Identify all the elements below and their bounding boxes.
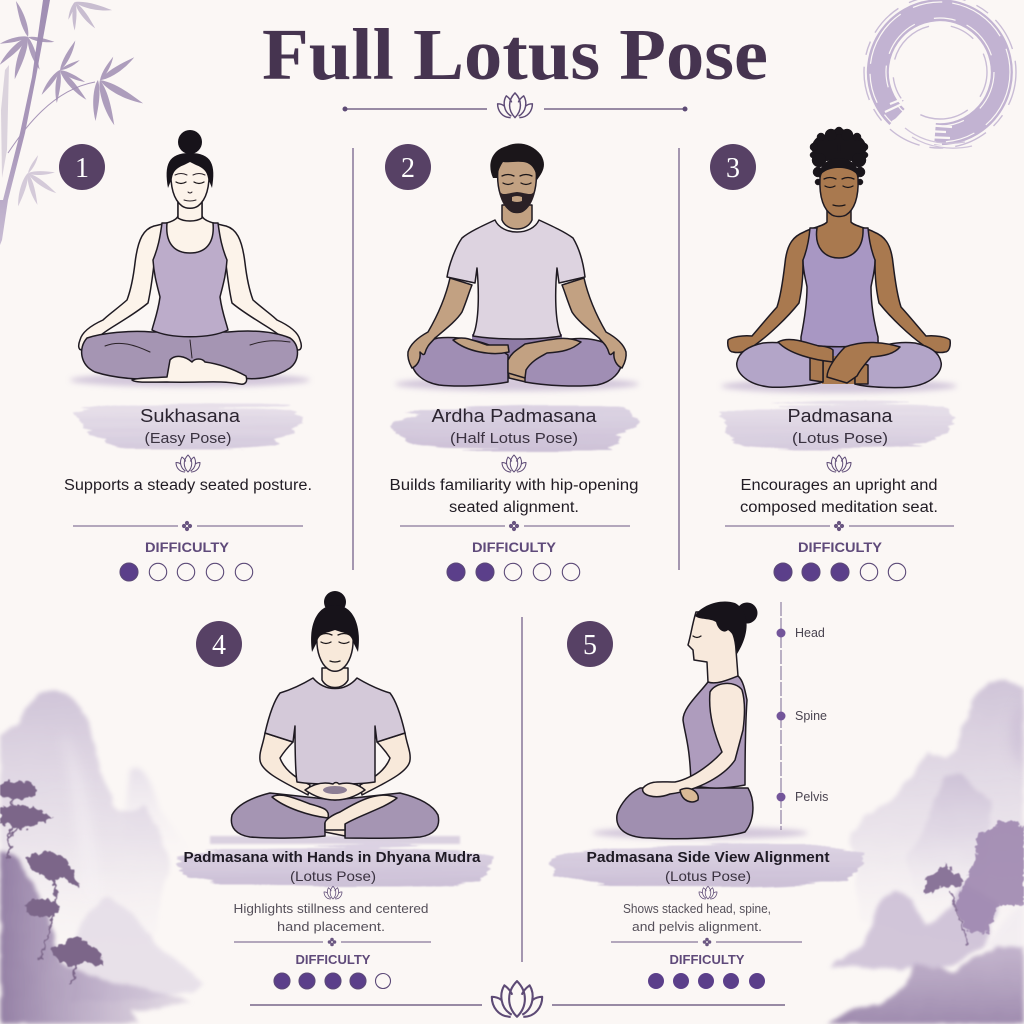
divider 4 xyxy=(234,938,431,946)
subtitle 3: (Lotus Pose) xyxy=(792,430,888,447)
footer ornament xyxy=(250,981,785,1017)
description 4: hand placement. xyxy=(277,919,385,934)
figure 5 xyxy=(592,601,808,839)
lotus icon 1 xyxy=(176,455,200,472)
panel 3: Padmasana xyxy=(710,127,957,581)
panel 5: Padmasana Side View Alignment xyxy=(550,601,865,989)
divider: column 4-5 xyxy=(521,617,523,962)
decoration: misty mountains bottom-right xyxy=(825,680,1024,1024)
description 3: Encourages an upright and xyxy=(740,477,938,494)
lotus icon 3 xyxy=(827,455,851,472)
decoration: bamboo top-left xyxy=(0,0,146,245)
name 2: Ardha Padmasana xyxy=(432,406,598,426)
figure 1 xyxy=(70,130,310,387)
number badge 2 xyxy=(385,144,431,190)
figure 2 xyxy=(395,143,639,391)
number badge 3 xyxy=(710,144,756,190)
description 5: and pelvis alignment. xyxy=(632,919,762,934)
alignment guide xyxy=(776,602,828,830)
decoration: misty mountains bottom-left xyxy=(0,690,205,1024)
subtitle 1: (Easy Pose) xyxy=(144,430,232,447)
divider 2 xyxy=(400,521,630,531)
rating dots 4 xyxy=(274,973,390,989)
lotus icon 5 xyxy=(699,886,717,899)
rating dots 2 xyxy=(447,563,580,581)
divider: column 2-3 xyxy=(678,148,680,570)
description 3 xyxy=(740,477,938,516)
panel 1: Sukhasana xyxy=(59,130,312,581)
name 3: Padmasana xyxy=(788,406,894,426)
description 2: Builds familiarity with hip-opening xyxy=(390,477,638,494)
title ornament xyxy=(343,93,687,118)
difficulty label 2: DIFFICULTY xyxy=(472,539,557,555)
number badge 4: 4 xyxy=(212,630,226,661)
divider: column 1-2 xyxy=(352,148,354,570)
name 4: Padmasana with Hands in Dhyana Mudra xyxy=(184,850,481,866)
name 5: Padmasana Side View Alignment xyxy=(586,850,830,866)
divider 1 xyxy=(73,521,303,531)
description 4 xyxy=(234,901,428,934)
description 4: Highlights stillness and centered xyxy=(234,901,428,916)
number badge 2: 2 xyxy=(401,153,415,184)
number badge 1 xyxy=(59,144,105,190)
figure 4 xyxy=(210,591,460,844)
alignment guide: Pelvis xyxy=(795,790,828,804)
panel 4: Padmasana with Hands in Dhyana Mudra xyxy=(175,591,495,989)
number badge 3: 3 xyxy=(726,153,740,184)
subtitle 2: (Half Lotus Pose) xyxy=(450,430,578,447)
name band 5 xyxy=(550,845,865,887)
subtitle 4: (Lotus Pose) xyxy=(290,868,376,884)
divider 3 xyxy=(725,521,954,531)
description 2 xyxy=(390,477,638,516)
difficulty label 4: DIFFICULTY xyxy=(296,952,371,967)
description 5: Shows stacked head, spine, xyxy=(623,901,771,916)
rating dots 1 xyxy=(120,563,253,581)
divider 5 xyxy=(611,938,802,946)
rating dots 3 xyxy=(774,563,906,581)
name band 4 xyxy=(175,845,495,888)
rating dots 5 xyxy=(648,973,765,989)
difficulty label 5: DIFFICULTY xyxy=(670,952,745,967)
title: Full Lotus Pose xyxy=(262,14,768,95)
lotus icon 2 xyxy=(502,455,526,472)
number badge 1: 1 xyxy=(75,153,89,184)
difficulty label 3: DIFFICULTY xyxy=(798,539,883,555)
figure 3 xyxy=(721,127,957,393)
name band 3 xyxy=(722,404,955,450)
description 1: Supports a steady seated posture. xyxy=(64,477,312,494)
difficulty label 1: DIFFICULTY xyxy=(145,539,230,555)
name band 1 xyxy=(72,404,305,450)
panel 2: Ardha Padmasana xyxy=(385,143,640,581)
description 3: composed meditation seat. xyxy=(740,499,938,516)
decoration: enso circle top-right xyxy=(864,0,1016,148)
name 1: Sukhasana xyxy=(140,406,241,426)
lotus icon 4 xyxy=(324,886,342,899)
number badge 5 xyxy=(567,621,613,667)
number badge 4 xyxy=(196,621,242,667)
description 2: seated alignment. xyxy=(449,499,579,516)
alignment guide: Spine xyxy=(795,709,827,723)
alignment guide: Head xyxy=(795,626,825,640)
name band 2 xyxy=(392,405,640,451)
subtitle 5: (Lotus Pose) xyxy=(665,868,751,884)
description 5 xyxy=(623,901,771,934)
number badge 5: 5 xyxy=(583,630,597,661)
